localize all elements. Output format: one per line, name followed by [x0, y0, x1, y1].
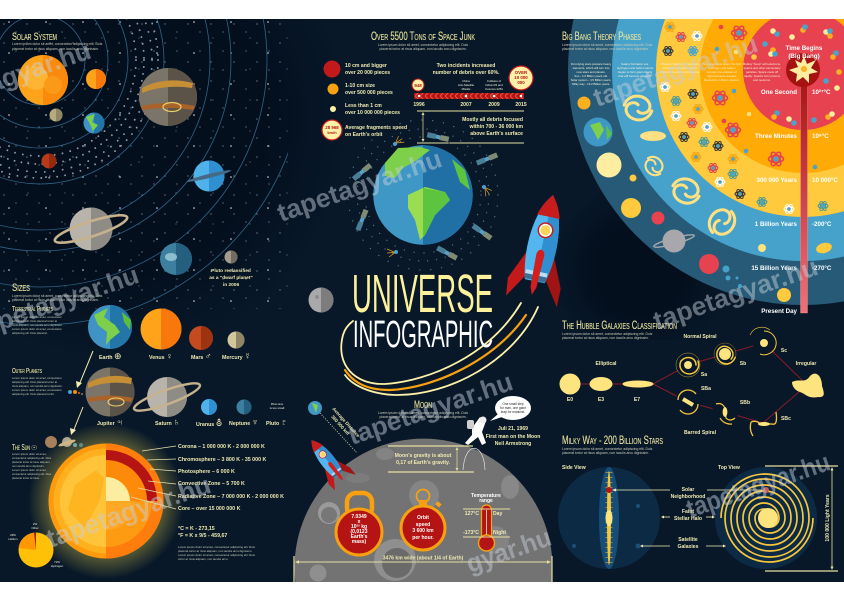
elliptical galaxies: E7	[634, 397, 640, 403]
watermarks: tapetagyar.hu	[649, 251, 822, 336]
labels: outer names: Jupiter ♃	[97, 417, 123, 427]
big bang phase descriptions: quarks and other elementary	[744, 66, 781, 70]
text: the sun: placerat tortor at risus aliquam,	[12, 460, 51, 464]
milky way labels and arrows: Satellite	[678, 537, 698, 543]
text: outer planets: adipiscing elit. Duis placerat tortor at	[12, 380, 57, 384]
moon section heading: Lorem ipsum dolor sit amet, consectetur adipiscing elit. Duis	[378, 411, 468, 415]
sun layer labels: Chromosphere – 3 800 K - 35 000 K	[178, 457, 266, 463]
sun layer labels	[131, 444, 284, 512]
text: two incidents: Two incidents increased	[437, 63, 495, 69]
size: uranus	[201, 399, 217, 415]
hubble labels: Elliptical	[596, 361, 617, 367]
labels: epochs and temperatures: Three Minutes	[755, 133, 798, 140]
big bang phase descriptions: new stars and planets.	[577, 70, 606, 74]
text: pluto reclassified: in 2006	[223, 282, 239, 288]
big bang phase descriptions: Photons. Electrons, Neutrons,	[661, 62, 699, 66]
size: pluto note	[270, 402, 285, 410]
heading: milky way: Milky Way - 200 Billion Stars	[562, 435, 663, 447]
rocket: large	[504, 189, 579, 307]
big bang phase descriptions: elements, which will turn into	[573, 66, 610, 70]
moon section heading	[378, 399, 468, 419]
text: outer planets: Outer Planets	[12, 366, 42, 375]
labels: outer names: Pluto ♇	[266, 417, 287, 427]
big bang phase descriptions: Milky way - 13.2 Billion years.	[572, 82, 610, 86]
planet: earth	[84, 112, 104, 134]
rocket: small	[301, 432, 356, 492]
big bang phase descriptions	[571, 62, 781, 86]
milky way side view: Side View	[562, 465, 586, 471]
particles	[751, 24, 842, 126]
small moon	[308, 288, 334, 312]
timeline: debris growth: 2015	[515, 102, 527, 108]
temperature formulas	[178, 526, 227, 539]
big bang phase descriptions: rapidly. Quarks form protons	[744, 74, 781, 78]
kettlebell: moon mass: x	[358, 519, 361, 525]
normal spiral galaxies	[676, 327, 776, 377]
heading: space junk: Lorem ipsum dolor sit amet, consectetur adipiscing elit. Duis	[378, 43, 468, 47]
labels: outer names: Neptune ♆	[229, 417, 258, 427]
size: venus	[140, 308, 182, 350]
planet: mars	[42, 154, 57, 168]
barred spiral galaxies	[675, 389, 776, 436]
sun text block: tortor at risus aliquam, non iaculis arcu.	[178, 557, 228, 561]
big bang phase descriptions: First dying stars produce heavy	[571, 62, 612, 66]
heading: milky way: Lorem ipsum dolor sit amet, consectetur adipiscing elit. Duis	[562, 447, 653, 451]
kettlebell: moon mass: Earth's	[351, 534, 368, 540]
stat: fragment speed	[322, 120, 407, 140]
planet: jupiter	[139, 68, 197, 126]
pie chart: sun composition: 72%	[54, 560, 60, 564]
legend: debris sizes: Less than 1 cm	[345, 103, 382, 109]
heading: solar system: placerat tortor at risus aliquam, non iaculis arcu dignissim.	[12, 47, 99, 51]
milky way labels and arrows: Stellar Halo	[674, 516, 702, 522]
milky way diameter scale: 100 000 Light Years	[825, 494, 831, 542]
astronaut with speech bubble	[465, 396, 531, 445]
altitude band note: above Earth's surface	[470, 131, 523, 137]
text: the sun: consectetur adipiscing elit. Duis	[12, 472, 52, 476]
moon width arrow: 3476 km wide (about 1/4 of Earth)	[383, 556, 464, 562]
altitude band note: within 700 - 36 000 km	[468, 124, 523, 130]
sun layer labels: Corona – 1 000 000 K - 2 000 000 K	[178, 444, 265, 450]
thermometer: temperature range	[463, 493, 510, 551]
milky way labels and arrows: Neighborhood	[671, 494, 705, 500]
astronaut with speech bubble: One small step	[502, 402, 524, 406]
text: two incidents: number of debris over 60%.	[433, 70, 500, 76]
watermarks: tapetagyar.hu	[344, 366, 517, 451]
stopwatch: orbit speed: 3 600 km	[412, 528, 434, 534]
sun text block: placerat tortor at risus aliquam, non iaculis arcu dignissim.	[178, 549, 252, 553]
stat: fragment speed: on Earth's orbit	[345, 132, 383, 138]
kettlebell: moon mass: 7.0349	[351, 514, 367, 520]
timeline: debris growth: Collision of	[487, 79, 501, 83]
milky way labels and arrows: Faint	[682, 509, 694, 515]
hubble labels: SBb	[740, 400, 750, 406]
mini planets row	[68, 390, 83, 395]
labels: outer names	[97, 417, 287, 428]
rocket trails	[341, 303, 538, 395]
legend: debris sizes: 1-10 cm size	[345, 83, 375, 89]
labels: epochs and temperatures: 15 Billion Years	[751, 265, 798, 272]
arrow: earth scale	[76, 351, 93, 388]
heading: big bang: Big Bang Theory Phases	[562, 31, 641, 43]
stopwatch: orbit speed: Orbit	[417, 515, 429, 521]
heading: milky way: placerat tortor at risus aliquam, non iaculis arcu dignissim.	[562, 451, 649, 455]
milky way diameter scale	[765, 466, 838, 571]
text: pluto reclassified: Pluto reclassified	[211, 268, 251, 274]
stat: fragment speed: km/h	[327, 130, 337, 135]
text: first man on the moon: Neil Armstrong	[495, 441, 531, 447]
watermarks: tapetagyar.hu	[273, 143, 446, 228]
title: INFOGRAPHIC	[353, 314, 493, 356]
heading: big bang: placerat tortor at risus aliquam, non iaculis arcu dignissim.	[562, 47, 649, 51]
milky way side view	[558, 465, 660, 569]
big bang phase descriptions: particles. Space cools off	[746, 70, 778, 74]
text: the sun: consectetur adipiscing elit. Duis	[12, 456, 52, 460]
text: the sun: Lorem ipsum dolor sit amet,	[12, 452, 47, 456]
moon section heading: Moon	[414, 399, 432, 411]
moon surface	[295, 439, 552, 582]
elliptical galaxies: E0	[567, 397, 573, 403]
hubble labels: Sa	[701, 372, 707, 378]
elliptical galaxies: E3	[598, 397, 604, 403]
planet: saturn	[53, 208, 129, 250]
big bang phase descriptions: Sun - 4.6 Billion years old.	[574, 74, 608, 78]
stopwatch: orbit speed: per hour.	[412, 535, 434, 541]
text: first man on the moon: First man on the Moon	[486, 434, 540, 440]
labels: terrestrial names: Mercury ☿	[222, 351, 251, 361]
hubble connecting lines	[570, 343, 807, 423]
mini gas giants	[45, 436, 83, 448]
size: mercury	[228, 332, 244, 348]
big bang phase descriptions: began to form giant clouds	[618, 70, 653, 74]
watermarks: tapetagyar.hu	[42, 469, 215, 554]
milky way top view	[715, 465, 817, 569]
temperature formulas: °F = K x 9/5 - 459,67	[178, 533, 227, 539]
heading: sizes: placerat tortor at risus aliquam, non iaculis arcu dignissim.	[12, 298, 99, 302]
heading: sizes	[12, 282, 103, 302]
galaxies band	[621, 92, 833, 255]
sun layer labels: Radiative Zone – 7 000 000 K - 2 000 000 K	[178, 494, 284, 500]
big bang timeline column	[786, 53, 820, 313]
watermarks: gyar.hu	[462, 522, 555, 579]
heading: hubble	[562, 320, 677, 340]
big bang phase descriptions: Boiling "Soup" with electrons,	[743, 62, 781, 66]
labels: epochs and temperatures	[751, 89, 838, 315]
timeline: debris growth: 10 000	[514, 75, 528, 80]
milky way labels and arrows	[612, 487, 762, 550]
moon gravity: 0,17 of Earth's gravity.	[396, 460, 450, 466]
title	[352, 264, 493, 356]
labels: time begins	[786, 45, 823, 60]
size: earth	[88, 305, 132, 349]
text: outer planets: Lorem ipsum dolor sit amet, consectetur	[12, 376, 62, 380]
labels: epochs and temperatures: 10⁹°C	[812, 133, 829, 140]
altitude band note: Mostly all debris focused	[462, 117, 523, 123]
thermometer: temperature range: range	[479, 498, 493, 504]
text: terrestrial planets: Lorem ipsum dolor sit amet, consectetur	[12, 315, 62, 319]
size: pluto note: is too small	[270, 406, 285, 410]
labels: epochs and temperatures: 10²⁷°C	[812, 89, 831, 96]
heading: space junk: Over 5500 Tons of Space Junk	[371, 31, 475, 43]
kettlebell: moon mass	[336, 493, 382, 555]
distance earth to moon: Average Distance	[331, 406, 361, 439]
irregular galaxy	[792, 374, 824, 397]
altitude band note	[417, 111, 524, 143]
labels: time begins: Time Begins	[786, 45, 823, 52]
thermometer: temperature range: Night	[493, 530, 506, 536]
pie chart: sun composition: Other	[31, 526, 39, 530]
size: pluto note: Pluto size	[271, 402, 284, 406]
text: the sun	[12, 443, 52, 480]
big bang phase descriptions: Hydrogen and helium atoms	[617, 66, 654, 70]
present day bodies	[578, 96, 791, 302]
heading: hubble: Lorem ipsum dolor sit amet, consectetur adipiscing elit. Duis	[562, 332, 653, 336]
sun layer labels: Convective Zone – 5 700 K	[178, 481, 245, 487]
labels: epochs and temperatures: -270°C	[812, 265, 832, 272]
timeline: debris growth: OVER	[515, 70, 528, 75]
heading: solar system	[12, 31, 103, 51]
kettlebell: moon mass: mass)	[352, 539, 367, 545]
text: first man on the moon: Juli 21, 1969	[498, 426, 528, 432]
thermometer: temperature range: -173°C	[463, 530, 479, 536]
sun text block: Lorem ipsum dolor sit amet, consectetur adipiscing elit. Duis	[178, 553, 256, 557]
text: the sun: non iaculis arcu dignissim.	[12, 464, 45, 468]
thermometer: temperature range: Day	[493, 511, 503, 517]
timeline: debris growth: Anti-Satellite	[458, 83, 475, 87]
big bang phase descriptions: Universe cools down, the first	[703, 62, 741, 66]
timeline: debris growth: China	[462, 79, 470, 83]
big bang phase descriptions: Universe becomes transparent.	[660, 70, 700, 74]
pie chart: sun composition: 2%	[33, 522, 38, 526]
moon gravity	[388, 446, 485, 472]
text: outer planets: adipiscing elit. Duis placerat tortor.	[12, 392, 55, 396]
kettlebell: moon mass: (0,0123	[351, 529, 368, 535]
labels: outer names: Saturn ♄	[155, 417, 180, 427]
legend: debris sizes: 10 cm and bigger	[345, 63, 387, 69]
timeline: debris growth: 000	[517, 80, 525, 85]
big bang rings	[568, 0, 844, 305]
size: saturn	[132, 377, 202, 417]
timeline: debris growth: Missile	[462, 87, 471, 91]
heading: big bang: Lorem ipsum dolor sit amet, consectetur adipiscing elit. Duis	[562, 43, 653, 47]
heading: sizes: Sizes	[12, 282, 30, 294]
heading: hubble: placerat tortor at risus aliquam, non iaculis arcu dignissim.	[562, 336, 649, 340]
hubble labels	[596, 334, 816, 436]
hubble labels: Normal Spiral	[683, 334, 717, 340]
labels: epochs and temperatures: One Second	[761, 89, 797, 96]
planet: neptune	[160, 243, 192, 275]
labels: terrestrial names: Mars ♂	[191, 351, 212, 361]
planet: venus	[86, 69, 106, 89]
title: UNIVERSE	[352, 264, 493, 324]
timeline: debris growth: 948	[414, 83, 422, 88]
big bang phase descriptions: and neutrons.	[753, 78, 771, 82]
text: terrestrial planets: adipiscing elit. Duis placerat.	[12, 331, 48, 335]
sun layer labels: Core – over 15 000 000 K	[178, 506, 241, 512]
big bang phase descriptions: formed, the emission of	[707, 70, 737, 74]
planet: pluto	[224, 250, 238, 264]
hubble labels: Sb	[740, 361, 746, 367]
legend: debris sizes	[324, 60, 400, 116]
stopwatch: orbit speed	[401, 490, 445, 550]
moon gravity: Moon's gravity is about	[395, 453, 452, 459]
pie chart: sun composition	[8, 522, 64, 568]
timeline: debris growth: 2007	[460, 102, 472, 108]
satellites	[352, 132, 498, 260]
text: terrestrial planets: risus aliquam, non iaculis arcu dignissim.	[12, 323, 63, 327]
labels: outer names: Uranus ⛢	[196, 418, 222, 428]
timeline: debris growth: Cosmos 2251	[485, 87, 503, 91]
text: first man on the moon	[486, 426, 540, 447]
debris dots	[348, 120, 498, 270]
hubble labels: Sc	[781, 348, 787, 354]
text: the sun: Lorem ipsum dolor sit amet,	[12, 468, 47, 472]
hubble labels: Irregular	[796, 361, 816, 367]
milky way labels and arrows: Galaxies	[678, 544, 699, 550]
thermometer: temperature range: 127°C	[465, 511, 479, 517]
heading: big bang	[562, 31, 653, 51]
watermarks: tapetagyar.hu	[589, 28, 762, 113]
size: neptune	[236, 400, 252, 414]
distance earth to moon: 360 000 km	[330, 414, 350, 436]
heading: space junk: placerat tortor at risus aliquam, non iaculis arcu dignissim.	[379, 47, 467, 51]
big bang phase descriptions: light elements created,	[707, 74, 737, 78]
stat: fragment speed: Average fragments speed	[345, 125, 407, 131]
text: outer planets: Lorem ipsum dolor sit amet, consectetur	[12, 388, 62, 392]
heading: solar system: Lorem ipsum dolor sit amet, consectetur adipiscing elit. Duis	[12, 42, 103, 46]
moon width arrow	[294, 556, 552, 582]
labels: terrestrial names	[99, 351, 251, 361]
milky way labels and arrows: Solar	[682, 487, 694, 493]
earth with debris	[373, 145, 473, 245]
thermometer: temperature range: Temperature	[471, 493, 501, 499]
hubble labels: SBa	[701, 386, 711, 392]
big bang phase descriptions: combine to produce atoms,	[663, 66, 698, 70]
stopwatch: orbit speed: speed	[416, 522, 430, 528]
labels: epochs and temperatures: 1 Billion Years	[755, 221, 798, 228]
pie chart: sun composition: 26%	[10, 533, 16, 537]
heading: space junk	[371, 31, 475, 51]
sun layer labels: Photosphere – 6 000 K	[178, 469, 235, 475]
big bang phase descriptions: Galaxy formation era.	[621, 62, 649, 66]
legend: debris sizes: over 500 000 pieces	[345, 90, 393, 96]
labels: time begins: (Big Bang)	[788, 53, 820, 60]
text: two incidents	[433, 63, 500, 76]
planet: sun	[18, 55, 68, 105]
sun text block	[178, 545, 256, 561]
size: jupiter	[86, 368, 134, 416]
moon section heading: placerat tortor at risus aliquam, non iaculis arcu dignissim.	[379, 415, 467, 419]
pie chart: sun composition: Helium	[8, 537, 18, 541]
milky way top view: Top View	[718, 465, 740, 471]
text: terrestrial planets: adipiscing elit. Duis placerat tortor at	[12, 319, 57, 323]
heading: milky way	[562, 435, 663, 455]
labels: epochs and temperatures: Present Day	[761, 308, 798, 315]
text: pluto reclassified	[209, 268, 253, 288]
size: mars	[189, 326, 213, 350]
big bang phase descriptions: Solar system - 4.5 Billion years.	[571, 78, 611, 82]
atoms	[660, 22, 828, 214]
planet: uranus	[186, 160, 232, 192]
text: pluto reclassified: as a "dwarf planet"	[209, 275, 253, 281]
timeline: debris growth: 2009	[488, 102, 500, 108]
distance earth to moon	[308, 401, 361, 453]
hubble labels: SBc	[781, 416, 791, 422]
labels: epochs and temperatures: 300 000 Years	[756, 177, 798, 184]
text: the sun: ☉	[31, 445, 37, 452]
heading: hubble: The Hubble Galaxies Classification	[562, 320, 677, 332]
heading: solar system: Solar System	[12, 31, 57, 43]
big bang phase descriptions: that will become galaxies.	[619, 74, 652, 78]
text: outer planets: risus aliquam, non iaculis arcu dignissim.	[12, 384, 63, 388]
astronaut with speech bubble: for man, one giant	[500, 406, 526, 410]
timeline: debris growth: Iridium33 and	[485, 83, 503, 87]
big bang phase descriptions: hydrogen and helium	[708, 66, 736, 70]
elliptical galaxies	[560, 374, 654, 403]
legend: debris sizes: over 10 000 000 pieces	[345, 110, 400, 116]
sun text block: Lorem ipsum dolor sit amet, consectetur adipiscing elit. Duis	[178, 545, 256, 549]
text: terrestrial planets: Terrestrial Planets	[12, 304, 53, 313]
labels: epochs and temperatures: 10 000°C	[812, 177, 838, 184]
pie chart: sun composition: Hydrogen	[51, 564, 64, 568]
planet: mercury	[50, 108, 63, 122]
kettlebell: moon mass: 10²² kg	[351, 524, 367, 530]
panel: solar system	[0, 19, 288, 326]
labels: terrestrial names: Venus ♀	[149, 351, 173, 361]
arrow: jupiter scale	[70, 407, 83, 435]
text: terrestrial planets: Lorem ipsum dolor sit amet, consectetur	[12, 327, 62, 331]
stat: fragment speed: 28 968	[325, 125, 339, 130]
sun cross section	[28, 423, 184, 579]
astronaut with speech bubble: leap for mankind.	[501, 410, 525, 414]
text: terrestrial planets	[12, 304, 63, 335]
labels: epochs and temperatures: -200°C	[812, 221, 832, 228]
legend: debris sizes: over 20 000 pieces	[345, 70, 390, 76]
text: the sun: The Sun	[12, 443, 30, 452]
big bang phase descriptions: Deuterium, Lithium, Helium.	[704, 78, 740, 82]
temperature formulas: °C = K - 273,15	[178, 526, 215, 532]
text: the sun: placerat tortor at risus.	[12, 476, 40, 480]
hubble labels: Barred Spiral	[684, 430, 717, 436]
labels: terrestrial names: Earth ⊕	[99, 351, 122, 361]
timeline: debris growth: 1996	[413, 102, 425, 108]
heading: sizes: Lorem ipsum dolor sit amet, consectetur adipiscing elit. Duis	[12, 294, 103, 298]
text: outer planets	[12, 366, 63, 396]
timeline: debris growth	[412, 66, 533, 108]
